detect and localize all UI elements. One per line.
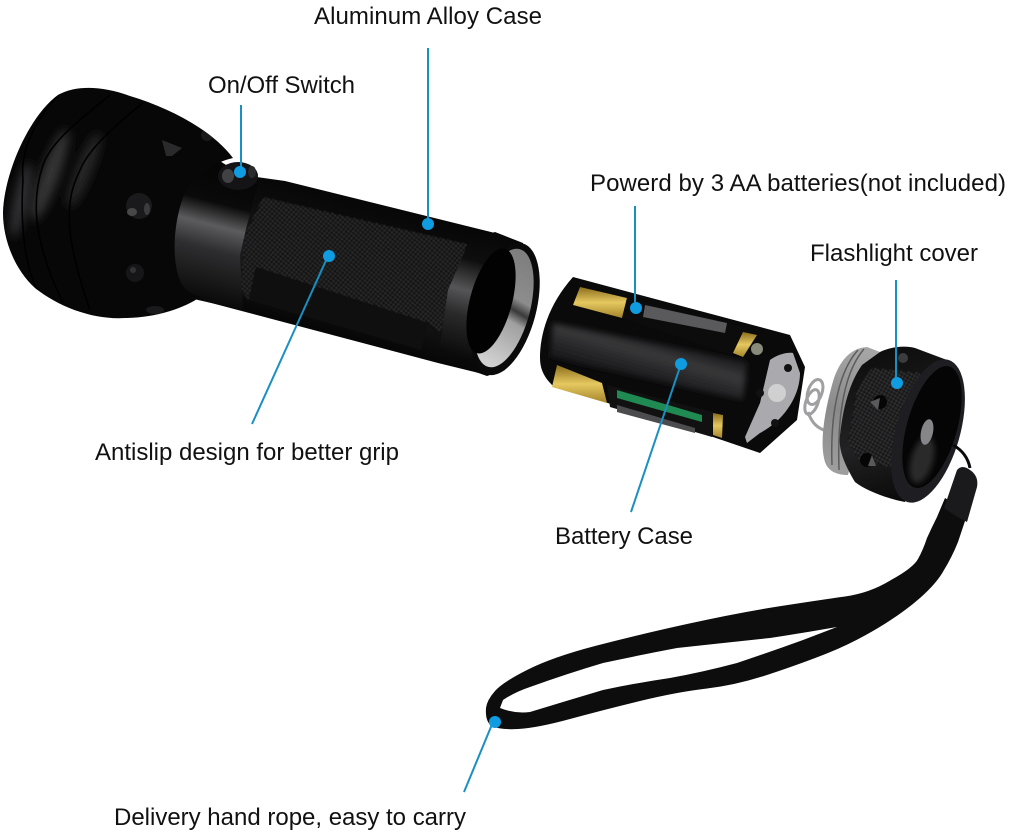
head sheen bands [6,127,106,239]
callout: antislip design [95,250,399,466]
cover body [840,347,947,502]
flashlight body [0,80,553,383]
bottom battery label [607,385,713,437]
callout: battery case: Battery Case [555,523,693,550]
head screws [126,129,213,314]
spring [802,377,826,431]
wrist strap [486,445,977,729]
strap cord [953,445,970,468]
callout: batteries: Powerd by 3 AA batteries(not included) [590,170,1006,197]
callout: hand rope [114,716,501,831]
head base [0,80,240,325]
case shell [540,277,805,453]
cover knurling [848,368,920,467]
callout: battery case [555,358,693,550]
callout: on/off switch [208,72,355,178]
callout: on/off switch: On/Off Switch [208,72,355,99]
callout: hand rope: Delivery hand rope, easy to carry [114,804,466,831]
callout: flashlight cover [810,240,978,389]
knurled grip [240,197,467,334]
head ridges [21,94,106,290]
tail opening rim [457,235,553,383]
callout: batteries [590,170,1006,314]
callout: aluminum alloy case [314,3,542,230]
callout: aluminum alloy case: Aluminum Alloy Case [314,3,542,30]
middle rib [550,323,747,400]
strap clip [944,467,977,522]
callout: antislip design: Antislip design for better grip [95,439,399,466]
callout: flashlight cover: Flashlight cover [810,240,978,267]
strap band [486,498,968,729]
bottom battery gold [552,365,607,403]
top battery label [622,298,753,355]
flashlight cover [823,347,979,511]
tail collar [440,232,523,376]
on/off switch button [218,162,258,190]
tail interior [457,243,525,359]
silver ring [823,347,880,475]
ring grooves [832,349,864,470]
flashlight tube [200,176,495,375]
top battery gold [573,287,627,318]
head [0,80,240,325]
cover front face [877,351,979,511]
grip flat panel [249,267,428,350]
neck [160,158,258,310]
cover holes [873,395,887,409]
battery case [540,277,826,453]
tail thread [463,242,545,374]
end plate [745,353,800,443]
